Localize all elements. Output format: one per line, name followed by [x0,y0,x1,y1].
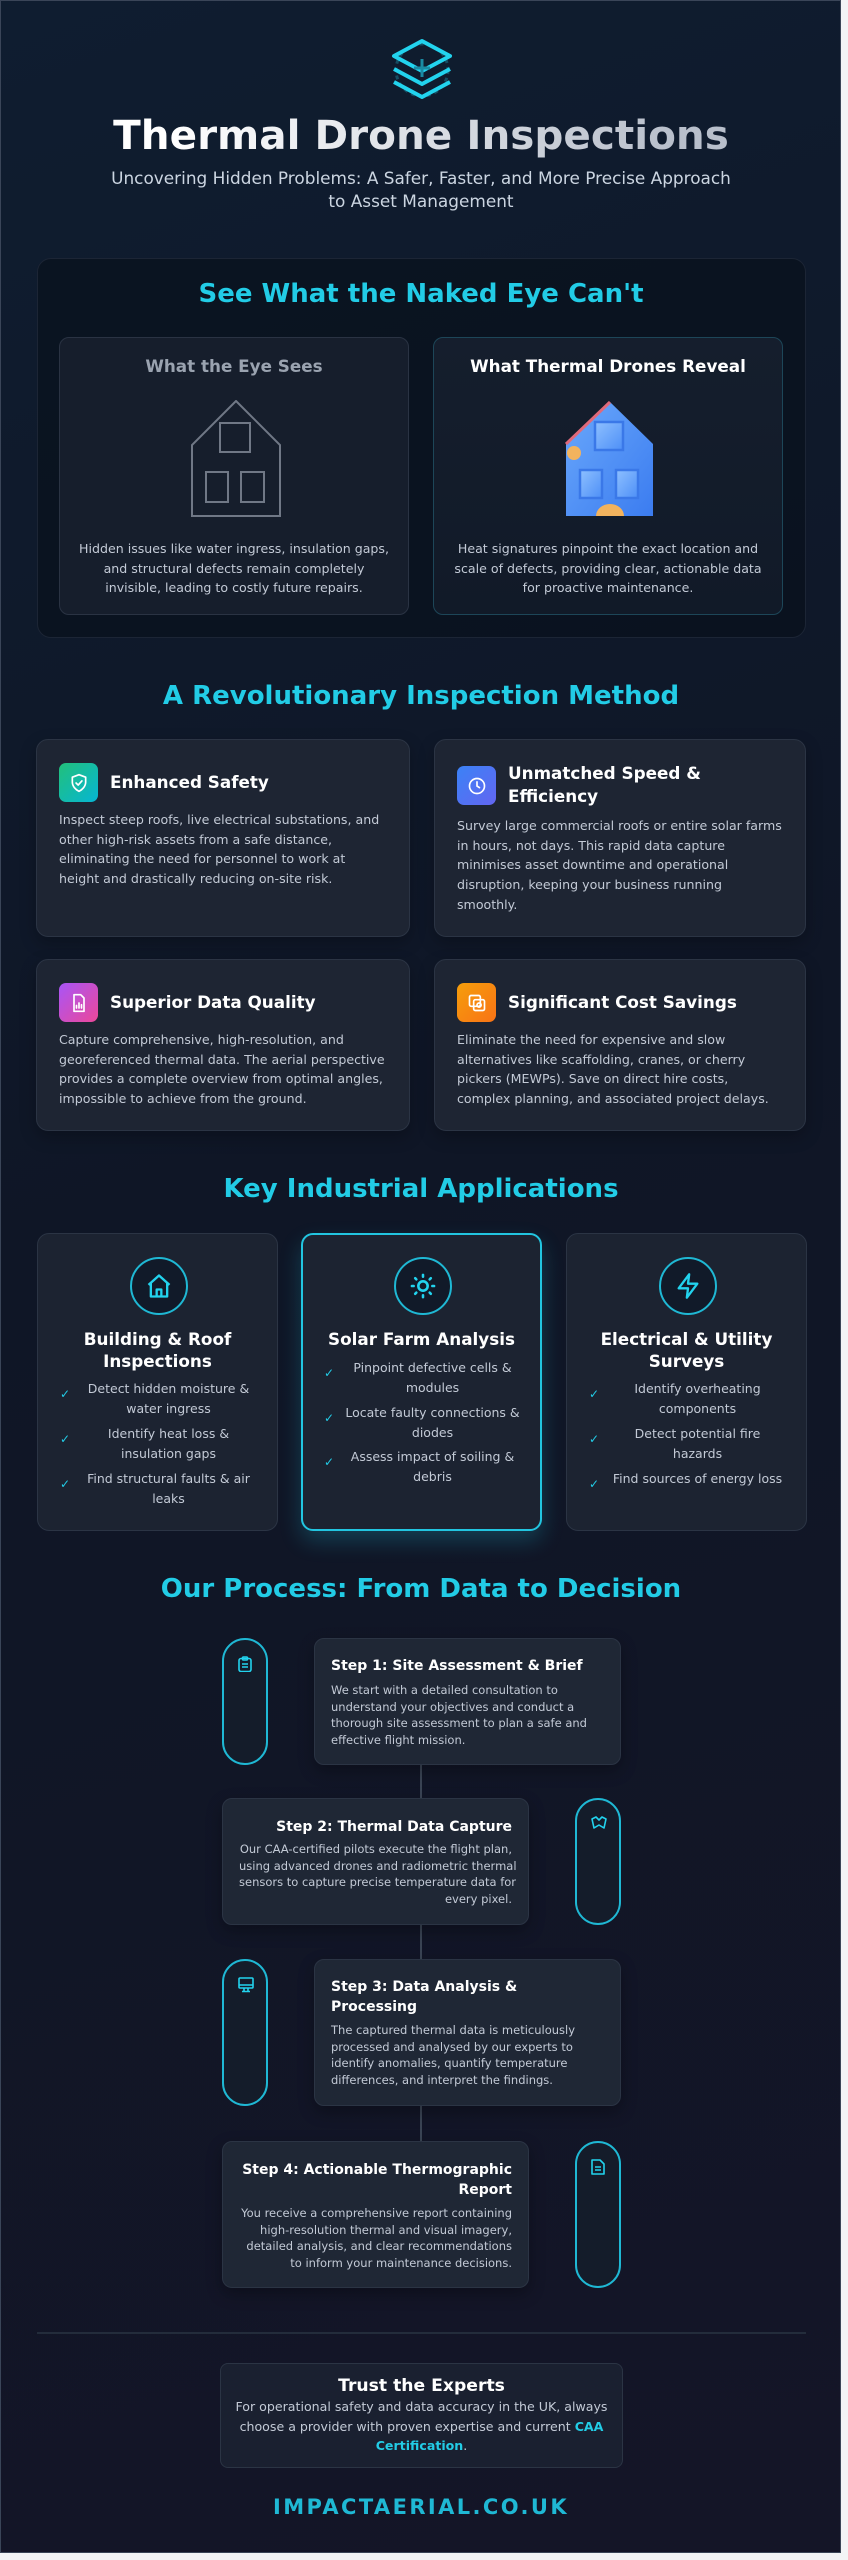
card: electrical & utility: Find sources of energy loss [613,1471,782,1486]
list [60,1381,249,1416]
callout text: choose a provider with proven expertise and current CAA [240,2419,603,2434]
list: components [659,1401,736,1416]
panel: see what the naked eye can't [37,258,806,638]
icon: lightning [659,1257,717,1315]
step card: using advanced drones and radiometric thermal [239,1859,517,1873]
step card: understand your objectives and conduct a [331,1700,574,1714]
text [59,812,379,886]
card: electrical & utility: ✓ [589,1477,599,1491]
text: impossible to achieve from the ground. [59,1091,307,1106]
list: ✓ [60,1387,70,1401]
pill icon: document [575,2141,621,2288]
text: Eliminate the need for expensive and slow [457,1032,725,1047]
card: significant cost savings [434,959,806,1131]
text [457,818,782,912]
step card: high-resolution thermal and visual imagery, [260,2223,512,2237]
card: building & roof: ✓ [60,1477,70,1491]
card text [79,541,389,595]
text: Survey large commercial roofs or entire solar farms [457,818,782,833]
card: building & roof: ✓ [60,1432,70,1446]
title [84,1329,232,1371]
list [324,1360,512,1395]
card: building & roof: Find structural faults & air [87,1471,250,1486]
step card [222,1798,529,1925]
icon: shield [59,763,98,802]
heading: key industrial applications: Key Industrial Applications [223,1174,619,1204]
icon: coins [457,983,496,1022]
step card [314,1638,621,1765]
title: Unmatched Speed & [508,763,701,783]
text [457,1032,769,1106]
heading: a revolutionary inspection method: A Revolutionary Inspection Method [163,681,679,711]
card: building & roof: Identify heat loss & [108,1426,229,1441]
text: Inspect steep roofs, live electrical substations, and [59,812,379,827]
title [508,763,701,806]
card: what thermal drones reveal [433,337,783,615]
card: unmatched speed [434,739,806,937]
step card: Our CAA-certified pilots execute the flight plan, [240,1842,512,1856]
card: electrical & utility [566,1233,807,1531]
step card: The captured thermal data is meticulously [331,2023,575,2037]
icon: sun [394,1257,452,1315]
icon: outline house [191,400,281,517]
card: solar farm (highlighted): ✓ [324,1411,334,1425]
card: superior data quality [36,959,410,1131]
text: complex planning, and associated project delays. [457,1091,769,1106]
card: building & roof: insulation gaps [121,1446,216,1461]
text [59,1032,385,1106]
step card: You receive a comprehensive report containing [241,2206,512,2220]
pill icon: clipboard [222,1638,268,1765]
text: other high-risk assets from a safe distance, [59,832,332,847]
heading: see what the naked eye can't: See What the Naked Eye Can't [198,279,644,309]
card: solar farm (highlighted) [301,1233,542,1531]
text: in hours, not days. This rapid data capture [457,838,725,853]
list: Identify overheating [634,1381,761,1396]
card: electrical & utility: Detect potential fire [635,1426,760,1441]
step card: detailed analysis, and clear recommendations [246,2239,512,2253]
list: modules [406,1380,459,1395]
callout: trust the experts [220,2363,623,2468]
step card: identify anomalies, quantify temperature [331,2056,567,2070]
pill icon: monitor [222,1959,268,2106]
card text: and structural defects remain completely [104,561,364,576]
text: georeferenced thermal data. The aerial perspective [59,1052,385,1067]
step card [314,1959,621,2106]
step card: Processing [331,1999,417,2015]
step card: Step 4: Actionable Thermographic [242,2162,512,2178]
title: Significant Cost Savings [508,992,737,1012]
footer: website: IMPACTAERIAL.CO.UK [273,2495,569,2519]
callout text: For operational safety and data accuracy in the UK, always [236,2399,608,2414]
list: ✓ [589,1387,599,1401]
title: Superior Data Quality [110,992,316,1012]
text: eliminating the need for personnel to work at [59,851,345,866]
title [601,1329,772,1371]
callout text: Certification. [376,2438,467,2453]
card text [454,541,762,595]
card text: scale of defects, providing clear, actionable data [454,561,762,576]
title: Surveys [649,1351,724,1371]
title: Efficiency [508,786,598,806]
title: Thermal Drone Inspections [113,111,729,159]
card: electrical & utility: hazards [673,1446,722,1461]
list: Pinpoint defective cells & [353,1360,512,1375]
step card: thorough site assessment to plan a safe and [331,1716,587,1730]
step 3 [222,1959,621,2116]
card title: What the Eye Sees [145,356,323,376]
card: solar farm (highlighted): diodes [412,1425,453,1440]
list: ✓ [324,1366,334,1380]
title: Solar Farm Analysis [328,1329,515,1349]
step 4 [222,2141,621,2290]
card: solar farm (highlighted): debris [413,1469,452,1484]
step card: sensors to capture precise temperature data for [239,1875,516,1889]
list [589,1381,761,1416]
title: Enhanced Safety [110,772,269,792]
text: pickers (MEWPs). Save on direct hire costs, [457,1071,728,1086]
title: Inspections [103,1351,212,1371]
step card: to inform your maintenance decisions. [290,2256,512,2270]
card: building & roof: leaks [152,1491,185,1506]
card text: Heat signatures pinpoint the exact location and [458,541,758,556]
text: alternatives like scaffolding, cranes, or cherry [457,1052,745,1067]
step card: differences, and interpret the findings. [331,2073,553,2087]
text: disruption, keeping your business running [457,877,722,892]
card title: What Thermal Drones Reveal [470,356,746,376]
icon: thermal house [565,400,653,516]
step card: We start with a detailed consultation to [331,1683,558,1697]
callout text [236,2399,608,2453]
step card: Step 3: Data Analysis & [331,1979,517,1995]
step 1 [222,1638,621,1774]
text: height and drastically reducing on-site risk. [59,871,332,886]
card: enhanced safety [36,739,410,937]
step card: Step 1: Site Assessment & Brief [331,1658,583,1674]
text: minimises asset downtime and operational [457,857,728,872]
card: solar farm (highlighted): Assess impact of soiling & [351,1449,514,1464]
step card: effective flight mission. [331,1733,465,1747]
card: building & roof [37,1233,278,1531]
icon: file chart [59,983,98,1022]
subtitle: Uncovering Hidden Problems: A Safer, Faster, and More Precise Approach [111,168,731,188]
icon: clock [457,766,496,805]
icon: home [130,1257,188,1315]
card: solar farm (highlighted): ✓ [324,1455,334,1469]
heading: our process: Our Process: From Data to Decision [161,1574,681,1604]
callout title: Trust the Experts [338,2376,505,2396]
card: solar farm (highlighted): Locate faulty connections & [345,1405,520,1420]
text: smoothly. [457,897,517,912]
title: Building & Roof [84,1329,231,1349]
step card: every pixel. [445,1892,512,1906]
step card: processed and analysed by our experts to [331,2040,573,2054]
pill icon: map [575,1798,621,1925]
list: Detect hidden moisture & [88,1381,249,1396]
step card [222,2141,529,2288]
card: electrical & utility: ✓ [589,1432,599,1446]
step card: Step 2: Thermal Data Capture [276,1819,512,1835]
logo icon [392,39,452,99]
subtitle [111,168,731,211]
card text: for proactive maintenance. [523,580,693,595]
text: Capture comprehensive, high-resolution, and [59,1032,344,1047]
text: provides a complete overview from optimal angles, [59,1071,383,1086]
card text: invisible, leading to costly future repairs. [105,580,363,595]
title: Electrical & Utility [601,1329,772,1349]
step card: Report [458,2182,512,2198]
card: what the eye sees [59,337,409,615]
subtitle: to Asset Management [328,191,514,211]
card text: Hidden issues like water ingress, insulation gaps, [79,541,389,556]
step 2 [222,1798,621,1934]
list: water ingress [126,1401,211,1416]
